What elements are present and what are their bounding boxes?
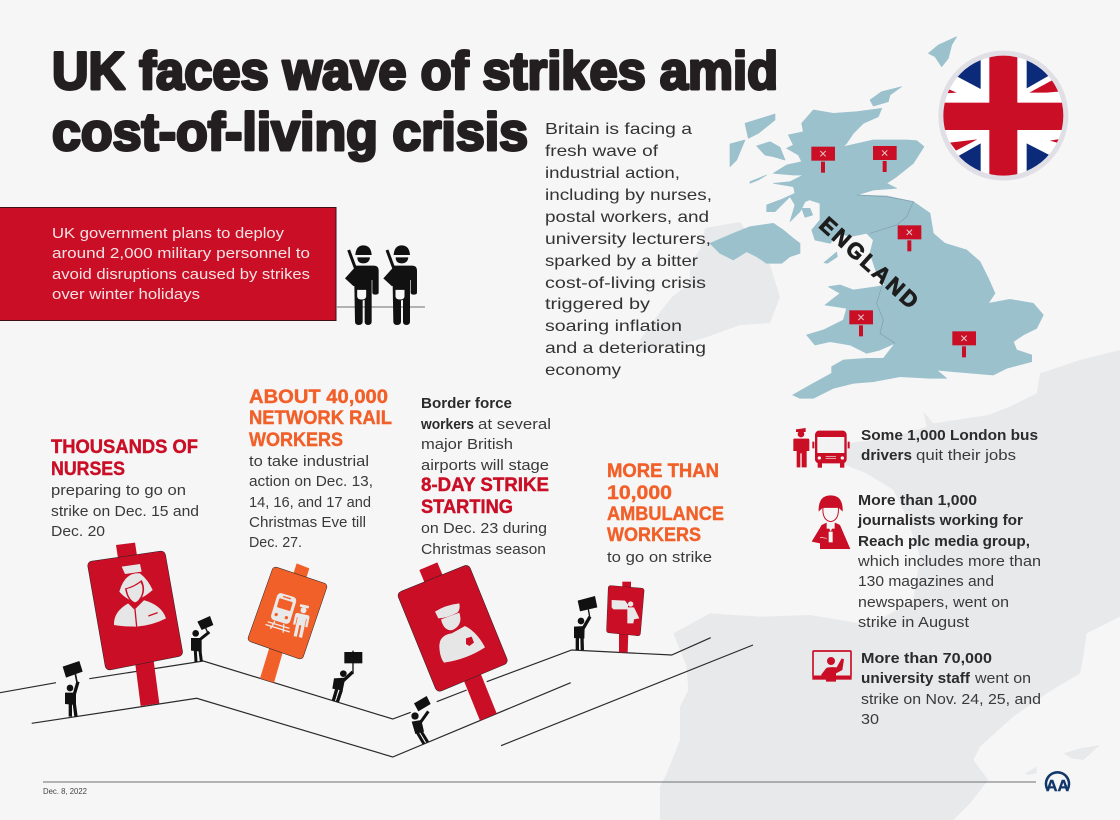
strike sign: northwest Scotland [811,147,835,173]
text: journalists: strike in August [858,614,970,631]
icon: lecturer at a board [812,651,852,682]
text: bus drivers: Some 1,000 London bus [861,427,1038,444]
text: university staff: 30 [861,711,879,728]
item: university staff [812,650,1041,728]
text block: border force workers: on Dec. 23 during [421,520,547,537]
intro text block: economy [545,362,621,379]
text block: ambulance workers: WORKERS [607,525,701,546]
text: university staff: went on [974,670,1031,687]
callout text: avoid disruptions caused by strikes [52,267,310,283]
icon: ambulance and worker [612,600,639,623]
text block: nurses: preparing to go on [51,482,186,499]
intro text block: triggered by [545,296,650,313]
intro text block: industrial action, [545,165,680,182]
logo: Anadolu Agency: AA [1046,778,1069,795]
icon: bus driver and bus [793,428,850,468]
text block: rail workers: Christmas Eve till [249,514,366,531]
map of the United Kingdom [710,37,1043,398]
intro text block: university lecturers, [545,231,711,248]
strike sign: Wales [849,310,873,336]
Outer Hebrides [745,114,775,138]
soldier one [345,245,379,325]
text: bus drivers [861,427,1038,464]
text: university staff: university staff [861,670,971,687]
text: journalists: 130 magazines and [858,573,994,590]
text block: border force workers: workers [420,416,474,433]
text block: rail workers: Dec. 27. [249,534,302,551]
intro text block: cost-of-living crisis [545,275,706,292]
intro text block: postal workers, and [545,209,709,226]
text block: border force workers: Border force [421,395,512,412]
Isle of Skye [757,142,785,160]
Islay and Jura [750,175,767,183]
date: Dec. 8, 2022 [43,786,87,796]
text: bus drivers: drivers [861,447,912,464]
road lines [0,638,753,757]
protester 2 [191,616,213,662]
text block: border force workers: 8-DAY STRIKE [421,475,549,496]
text block: rail workers: ABOUT 40,000 [249,387,388,408]
text block: ambulance workers: MORE THAN [607,461,719,482]
text block: rail workers: to take industrial [249,453,369,470]
intro text block: sparked by a bitter [545,253,699,270]
strike sign: southern England [952,331,976,357]
strike sign: northeast Scotland [873,146,897,172]
text block: rail workers: NETWORK RAIL [249,408,392,429]
text block: nurses: NURSES [51,459,125,480]
text block: rail workers: WORKERS [249,430,343,451]
callout text: UK government plans to deploy [52,226,285,242]
protester 1 [63,661,83,717]
text: university staff [861,650,1041,728]
text: bus drivers: quit their jobs [916,447,1016,464]
text: journalists [857,492,1041,631]
text block: border force workers: airports will stage [421,457,549,474]
protest sign: rail workers [252,563,323,683]
text: journalists: journalists working for [857,512,1023,529]
callout text [52,226,310,303]
Uist islands [730,140,745,167]
strike sign: northern England [898,225,921,251]
text: university staff: More than 70,000 [861,650,992,667]
protest sign: nurses [92,543,178,706]
text block: ambulance workers: 10,000 [607,483,672,504]
title: cost-of-living crisis [52,103,528,162]
protester 4 [411,696,431,744]
intro text block [545,121,712,379]
text block: ambulance workers: AMBULANCE [607,504,724,525]
text block: border force workers: major British [421,436,513,453]
callout text: over winter holidays [52,287,200,303]
item: journalists [812,492,1041,631]
icon: journalist with microphone [812,495,850,549]
callout text: around 2,000 military personnel to [52,246,310,262]
icon: train and rail worker [265,591,312,638]
intro text block: including by nurses, [545,187,712,204]
icon: nurse [114,564,166,627]
text: journalists: newspapers, went on [858,594,1009,611]
map label: England: ENGLAND [814,212,923,313]
title [52,42,778,162]
text block: rail workers [249,387,392,551]
icon: two soldiers on a ground line [336,245,425,325]
intro text block: Britain is facing a [545,121,692,138]
text block: rail workers: 14, 16, and 17 and [249,494,371,511]
intro text block: and a deteriorating [545,340,706,357]
Shetland islands [928,37,957,67]
protester 5 [574,596,597,650]
protest sign: border force [403,562,503,721]
text: journalists: which includes more than [857,553,1041,570]
text: journalists: More than 1,000 [858,492,977,509]
protester 3 [332,651,362,702]
text block: nurses: strike on Dec. 15 and [51,503,199,520]
item: bus drivers [793,427,1038,468]
Northern Ireland [710,223,800,263]
text block: border force workers [420,395,551,558]
text block: rail workers: action on Dec. 13, [249,473,373,490]
title: UK faces wave of strikes amid [52,42,778,101]
panel: military deployment callout [0,208,336,320]
Great Britain [767,108,1043,398]
text block: ambulance workers [607,461,724,566]
text block: nurses: THOUSANDS OF [51,437,198,458]
text: university staff: strike on Nov. 24, 25, and [861,691,1041,708]
text: journalists: Reach plc media group, [858,533,1030,550]
Isle of Man [824,252,837,263]
Orkney islands [870,87,902,106]
text block: ambulance workers: to go on strike [607,549,712,566]
text block: nurses [51,437,199,540]
Arran [802,208,813,217]
background map of Ireland, France and Spain [640,222,1120,820]
intro text block: fresh wave of [545,143,659,160]
text block: border force workers: at several [478,416,551,433]
text block: border force workers: Christmas season [421,541,546,558]
soldier two [383,245,417,325]
icon: Union Jack flag badge [933,50,1073,181]
icon: border officer [435,603,485,663]
text block: nurses: Dec. 20 [51,523,105,540]
intro text block: soaring inflation [545,318,682,335]
protest sign: ambulance workers [609,582,642,652]
text block: border force workers: STARTING [421,497,513,518]
